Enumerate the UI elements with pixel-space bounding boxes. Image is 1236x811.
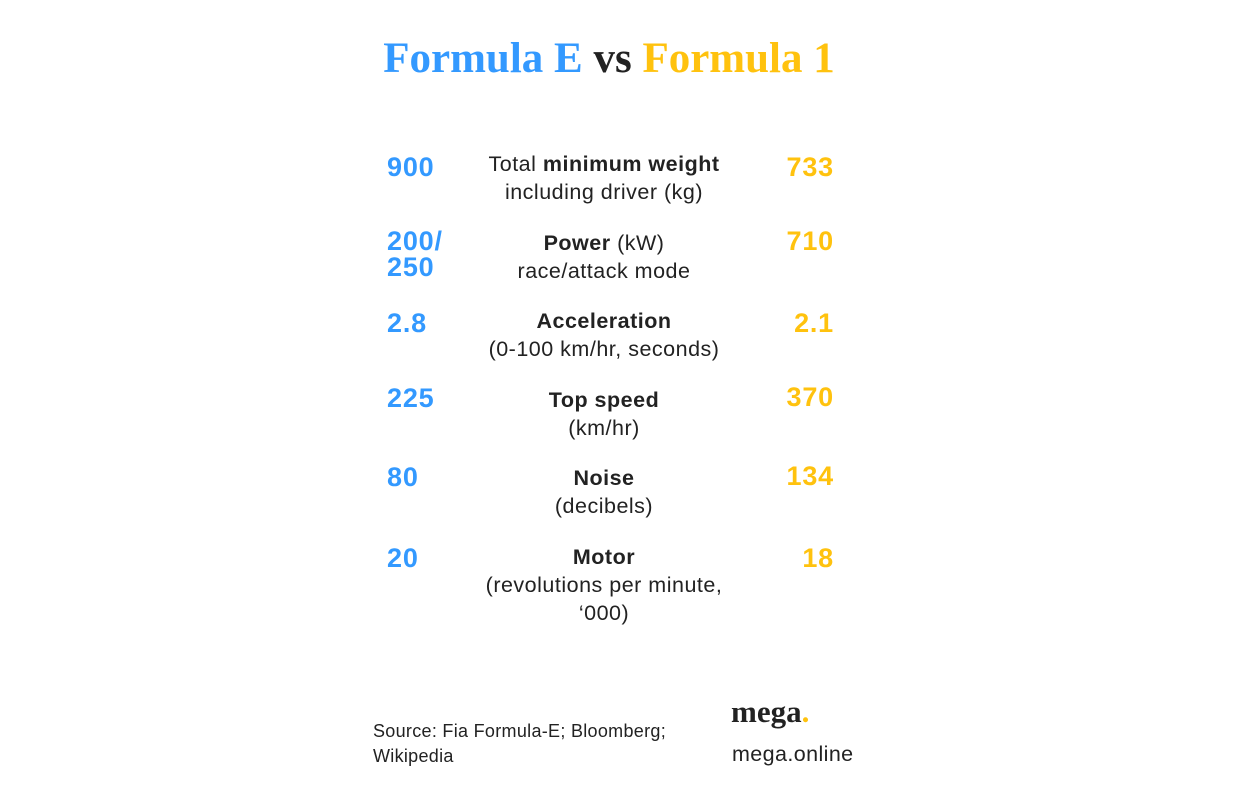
FE value — [387, 226, 443, 282]
label: Noise — [573, 466, 635, 490]
label: (km/hr) — [568, 416, 640, 440]
label — [518, 231, 690, 283]
label — [489, 309, 719, 361]
row: motor — [387, 543, 834, 625]
FE value: 80 — [387, 462, 419, 492]
website: mega.online — [732, 742, 854, 766]
logo: mega.: mega. — [731, 694, 809, 729]
label: (revolutions per minute, — [486, 573, 722, 597]
source — [373, 721, 666, 766]
label — [486, 545, 722, 625]
FE value: 200/ — [387, 226, 443, 256]
FE value: 900 — [387, 152, 434, 182]
title: Formula E vs Formula 1 — [383, 35, 835, 82]
label: race/attack mode — [518, 259, 690, 283]
FE value: 2.8 — [387, 308, 427, 338]
F1 value: 370 — [787, 382, 834, 412]
label: Top speed — [549, 388, 659, 412]
label: (decibels) — [555, 494, 653, 518]
label: ‘000) — [579, 601, 629, 625]
row: noise — [387, 461, 834, 518]
row: acceleration — [387, 308, 834, 361]
row: weight — [387, 152, 834, 204]
label — [549, 388, 659, 440]
label — [555, 466, 653, 518]
F1 value: 18 — [802, 543, 834, 573]
label — [488, 152, 720, 204]
F1 value: 2.1 — [794, 308, 834, 338]
FE value: 225 — [387, 383, 434, 413]
FE value: 250 — [387, 252, 434, 282]
source: Source: Fia Formula-E; Bloomberg; — [373, 721, 666, 741]
F1 value: 710 — [787, 226, 834, 256]
F1 value: 134 — [787, 461, 834, 491]
label: including driver (kg) — [505, 180, 703, 204]
label: Motor — [573, 545, 635, 569]
label: Total minimum weight — [488, 152, 720, 176]
label: Power (kW) — [544, 231, 664, 255]
label: (0-100 km/hr, seconds) — [489, 337, 719, 361]
row: top speed — [387, 382, 834, 440]
source: Wikipedia — [373, 746, 454, 766]
F1 value: 733 — [787, 152, 834, 182]
FE value: 20 — [387, 543, 419, 573]
label: Acceleration — [536, 309, 672, 333]
row: power — [387, 226, 834, 283]
